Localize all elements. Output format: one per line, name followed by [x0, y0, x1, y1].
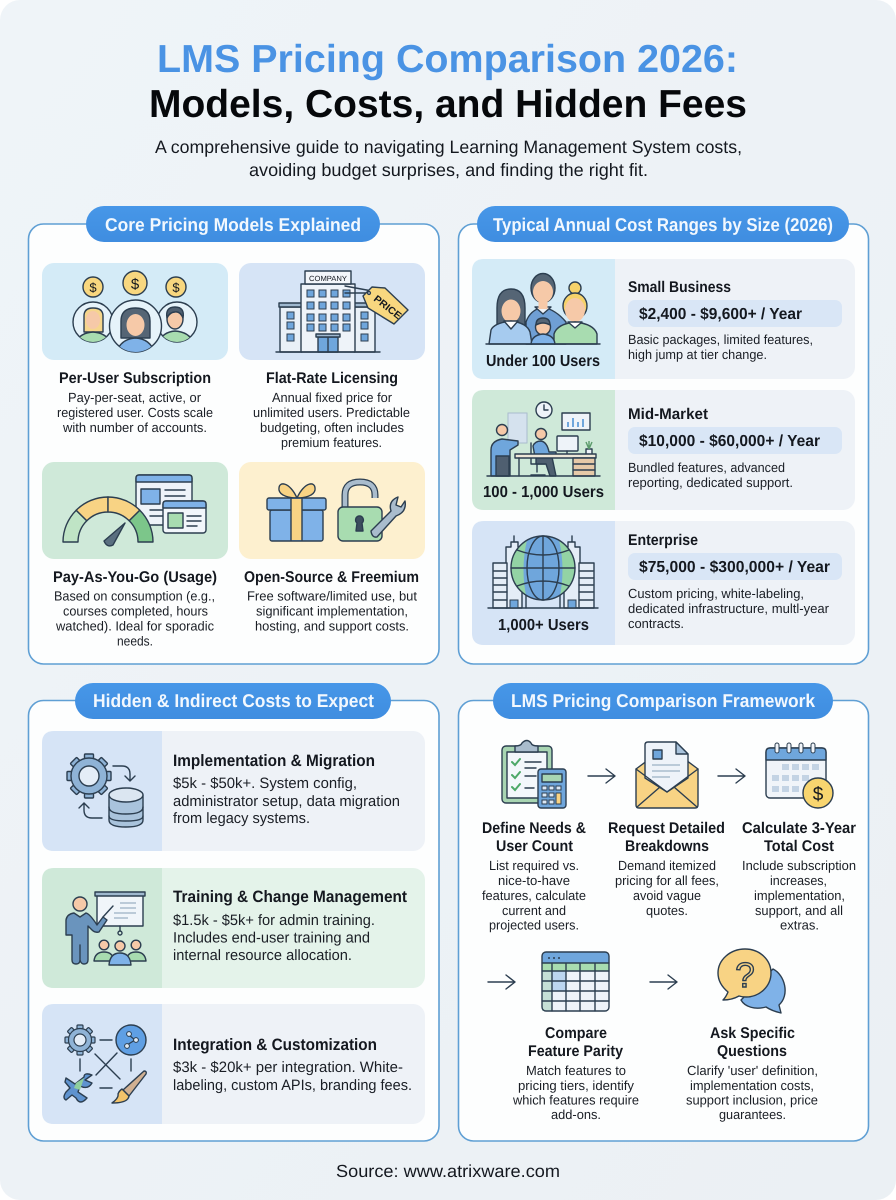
icon: presenter and audience [66, 892, 146, 965]
icon: clipboard and calculator [502, 740, 566, 808]
step text: quotes. [646, 903, 688, 918]
step text: increases, [770, 873, 827, 888]
step: calculate total cost [742, 743, 856, 932]
heading: annual cost ranges [477, 206, 849, 242]
subtitle [155, 137, 742, 180]
row text: from legacy systems. [173, 810, 310, 827]
icon: calendar and dollar coin: $ [813, 784, 824, 805]
tier name: Enterprise [628, 532, 698, 549]
icon: company building with price tag: COMPANY [309, 274, 347, 283]
step text: Include subscription [742, 858, 856, 873]
card: flat-rate licensing [239, 263, 425, 450]
step: request breakdowns [608, 742, 725, 918]
icon: integration tools [64, 1025, 146, 1103]
row: enterprise [472, 521, 855, 645]
heading: comparison framework: LMS Pricing Comparison Framework [511, 690, 816, 711]
row text [173, 775, 400, 827]
step text: implementation costs, [690, 1078, 814, 1093]
step text: Clarify 'user' definition, [687, 1063, 818, 1078]
step text: Demand itemized [618, 858, 716, 873]
step title: Breakdowns [625, 838, 709, 855]
card: pay-as-you-go [42, 462, 228, 648]
card text: Based on consumption (e.g., [54, 588, 215, 604]
step title: Questions [717, 1043, 787, 1060]
step title: Define Needs & [482, 820, 586, 837]
tier notes [628, 460, 793, 490]
heading: hidden costs: Hidden & Indirect Costs to Expect [93, 690, 374, 711]
step text: avoid vague [633, 888, 701, 903]
label: 1,000+ users: 1,000+ Users [498, 617, 589, 634]
title: LMS Pricing Comparison 2026: [157, 38, 738, 81]
step text: which features require [512, 1092, 639, 1108]
panel: hidden costs [28, 683, 439, 1141]
price range: $2,400 - $9,600+ / Year [639, 306, 802, 323]
tier name: Mid-Market [628, 406, 708, 423]
step text: pricing for all fees, [615, 873, 719, 888]
row text [173, 912, 375, 964]
card text [57, 390, 213, 435]
row: training and change management [42, 868, 425, 988]
row text [173, 1059, 412, 1094]
icon: users with coins [73, 271, 197, 354]
icon: globe and skyscrapers [488, 536, 598, 608]
panel: annual cost ranges [458, 206, 868, 664]
title [149, 38, 747, 126]
step title: Request Detailed [608, 820, 725, 837]
icon: company building with price tag: PRICE [371, 294, 403, 322]
step text: features, calculate [482, 888, 586, 903]
step text: projected users. [489, 918, 579, 932]
arrow [650, 975, 677, 989]
card title: Pay-As-You-Go (Usage) [53, 569, 217, 586]
tier notes: contracts. [628, 616, 684, 631]
step text: Match features to [526, 1063, 626, 1078]
card text: Annual fixed price for [272, 390, 393, 405]
arrow [588, 769, 615, 783]
arrow [718, 769, 745, 783]
icon: users with coins: $ [172, 280, 180, 295]
price range: $75,000 - $300,000+ / Year [639, 559, 830, 576]
icon: users with coins: $ [89, 280, 97, 295]
step title: Compare [545, 1025, 607, 1042]
step: define needs [482, 740, 586, 932]
heading: comparison framework [493, 683, 833, 719]
icon: users with coins: $ [131, 276, 140, 293]
card text: premium features. [281, 435, 382, 450]
card text: Free software/limited use, but [247, 588, 417, 604]
card text: registered user. Costs scale [57, 405, 213, 420]
card text: needs. [117, 634, 153, 648]
heading: core pricing models [86, 206, 380, 242]
heading: core pricing models: Core Pricing Models Explained [105, 214, 361, 235]
step text: List required vs. [489, 858, 579, 873]
tier notes: dedicated infrastructure, multl-year [628, 601, 830, 616]
icon: gift and open lock with wrench [267, 482, 405, 541]
icon: question speech bubbles: ? [735, 956, 755, 995]
card text: hosting, and support costs. [255, 618, 409, 634]
row text: $3k - $20k+ per integration. White- [173, 1059, 403, 1076]
step text: nice-to-have [498, 873, 570, 888]
price range [628, 300, 842, 327]
icon: small team [486, 274, 600, 344]
step title: Feature Parity [528, 1043, 623, 1060]
heading: hidden costs [75, 683, 391, 719]
price range [628, 553, 842, 580]
step text [615, 858, 719, 918]
row text: labeling, custom APIs, branding fees. [173, 1077, 412, 1094]
step title: Total Cost [764, 838, 834, 855]
card text: Pay-per-seat, active, or [68, 390, 202, 405]
row text: internal resource allocation. [173, 947, 352, 964]
tier notes [628, 586, 830, 631]
card title: Flat-Rate Licensing [266, 370, 398, 387]
card text [253, 390, 410, 450]
step title: User Count [496, 838, 573, 855]
card text [247, 588, 417, 634]
step text: add-ons. [551, 1107, 601, 1122]
step text: support inclusion, price [686, 1092, 818, 1108]
step text: extras. [780, 918, 819, 932]
step text [742, 858, 856, 932]
row title: Integration & Customization [173, 1036, 377, 1054]
row: implementation and migration [42, 731, 425, 851]
step title [742, 820, 856, 855]
row: small business [472, 259, 855, 379]
subtitle: A comprehensive guide to navigating Learning Management System costs, [155, 137, 742, 157]
row text: administrator setup, data migration [173, 793, 400, 810]
tier notes: Custom pricing, white-labeling, [628, 586, 804, 601]
panel: comparison framework [458, 683, 868, 1141]
card text: courses completed, hours [63, 604, 208, 618]
icon: question speech bubbles [718, 949, 785, 1013]
tier notes: high jump at tier change. [628, 347, 767, 362]
price range: $10,000 - $60,000+ / Year [639, 433, 820, 450]
title: Models, Costs, and Hidden Fees [149, 83, 747, 126]
card title: Per-User Subscription [59, 370, 211, 387]
step text: current and [502, 903, 566, 918]
row: mid-market [472, 390, 855, 510]
step title: Ask Specific [710, 1025, 795, 1042]
icon: office desk [487, 402, 600, 476]
row title: Training & Change Management [173, 888, 407, 906]
step title [710, 1025, 795, 1060]
panel: core pricing models [28, 206, 439, 664]
card text: unlimited users. Predictable [253, 405, 410, 420]
source line: Source: www.atrixware.com [336, 1161, 560, 1181]
step text: implementation, [754, 888, 845, 903]
tier notes: Basic packages, limited features, [628, 332, 813, 347]
tier notes: Bundled features, advanced [628, 460, 785, 475]
label: under 100 users: Under 100 Users [486, 353, 600, 370]
tier notes [628, 332, 813, 362]
row text: $1.5k - $5k+ for admin training. [173, 912, 375, 929]
step text [686, 1063, 818, 1122]
card text: with number of accounts. [62, 420, 207, 435]
step text [512, 1063, 639, 1122]
card text: budgeting, often includes [260, 420, 404, 435]
icon: envelope with document [636, 742, 698, 808]
tier notes: reporting, dedicated support. [628, 475, 793, 490]
row: integration and customization [42, 1004, 425, 1124]
price range [628, 427, 842, 454]
card title: Open-Source & Freemium [244, 569, 419, 586]
arrow [488, 975, 515, 989]
card text: significant implementation, [256, 604, 408, 618]
label: 100 to 1,000 users: 100 - 1,000 Users [483, 484, 604, 501]
step title [608, 820, 725, 855]
step text: support, and all [755, 903, 843, 918]
row text: Includes end-user training and [173, 930, 370, 946]
card: per-user subscription [42, 263, 228, 435]
step text: pricing tiers, identify [518, 1078, 634, 1093]
step title: Calculate 3-Year [742, 820, 856, 837]
step: ask specific questions [686, 949, 818, 1122]
step title [528, 1025, 623, 1060]
icon: gauge and browser windows [63, 475, 206, 546]
step title [482, 820, 586, 855]
tier name: Small Business [628, 279, 731, 296]
card: open-source and freemium [239, 462, 425, 634]
heading: annual cost ranges: Typical Annual Cost Ranges by Size (2026) [493, 214, 833, 235]
icon: company building with price tag [276, 271, 408, 352]
subtitle: avoiding budget surprises, and finding the right fit. [249, 160, 648, 180]
step: compare feature parity [512, 952, 639, 1122]
icon: calendar and dollar coin [766, 743, 833, 808]
step text [482, 858, 586, 932]
icon: gear and database [67, 754, 143, 827]
row title: Implementation & Migration [173, 752, 375, 770]
step text: guarantees. [719, 1107, 786, 1122]
icon: comparison table [542, 952, 609, 1011]
row text: $5k - $50k+. System config, [173, 775, 357, 792]
card text [54, 588, 215, 648]
card text: watched). Ideal for sporadic [55, 618, 214, 634]
